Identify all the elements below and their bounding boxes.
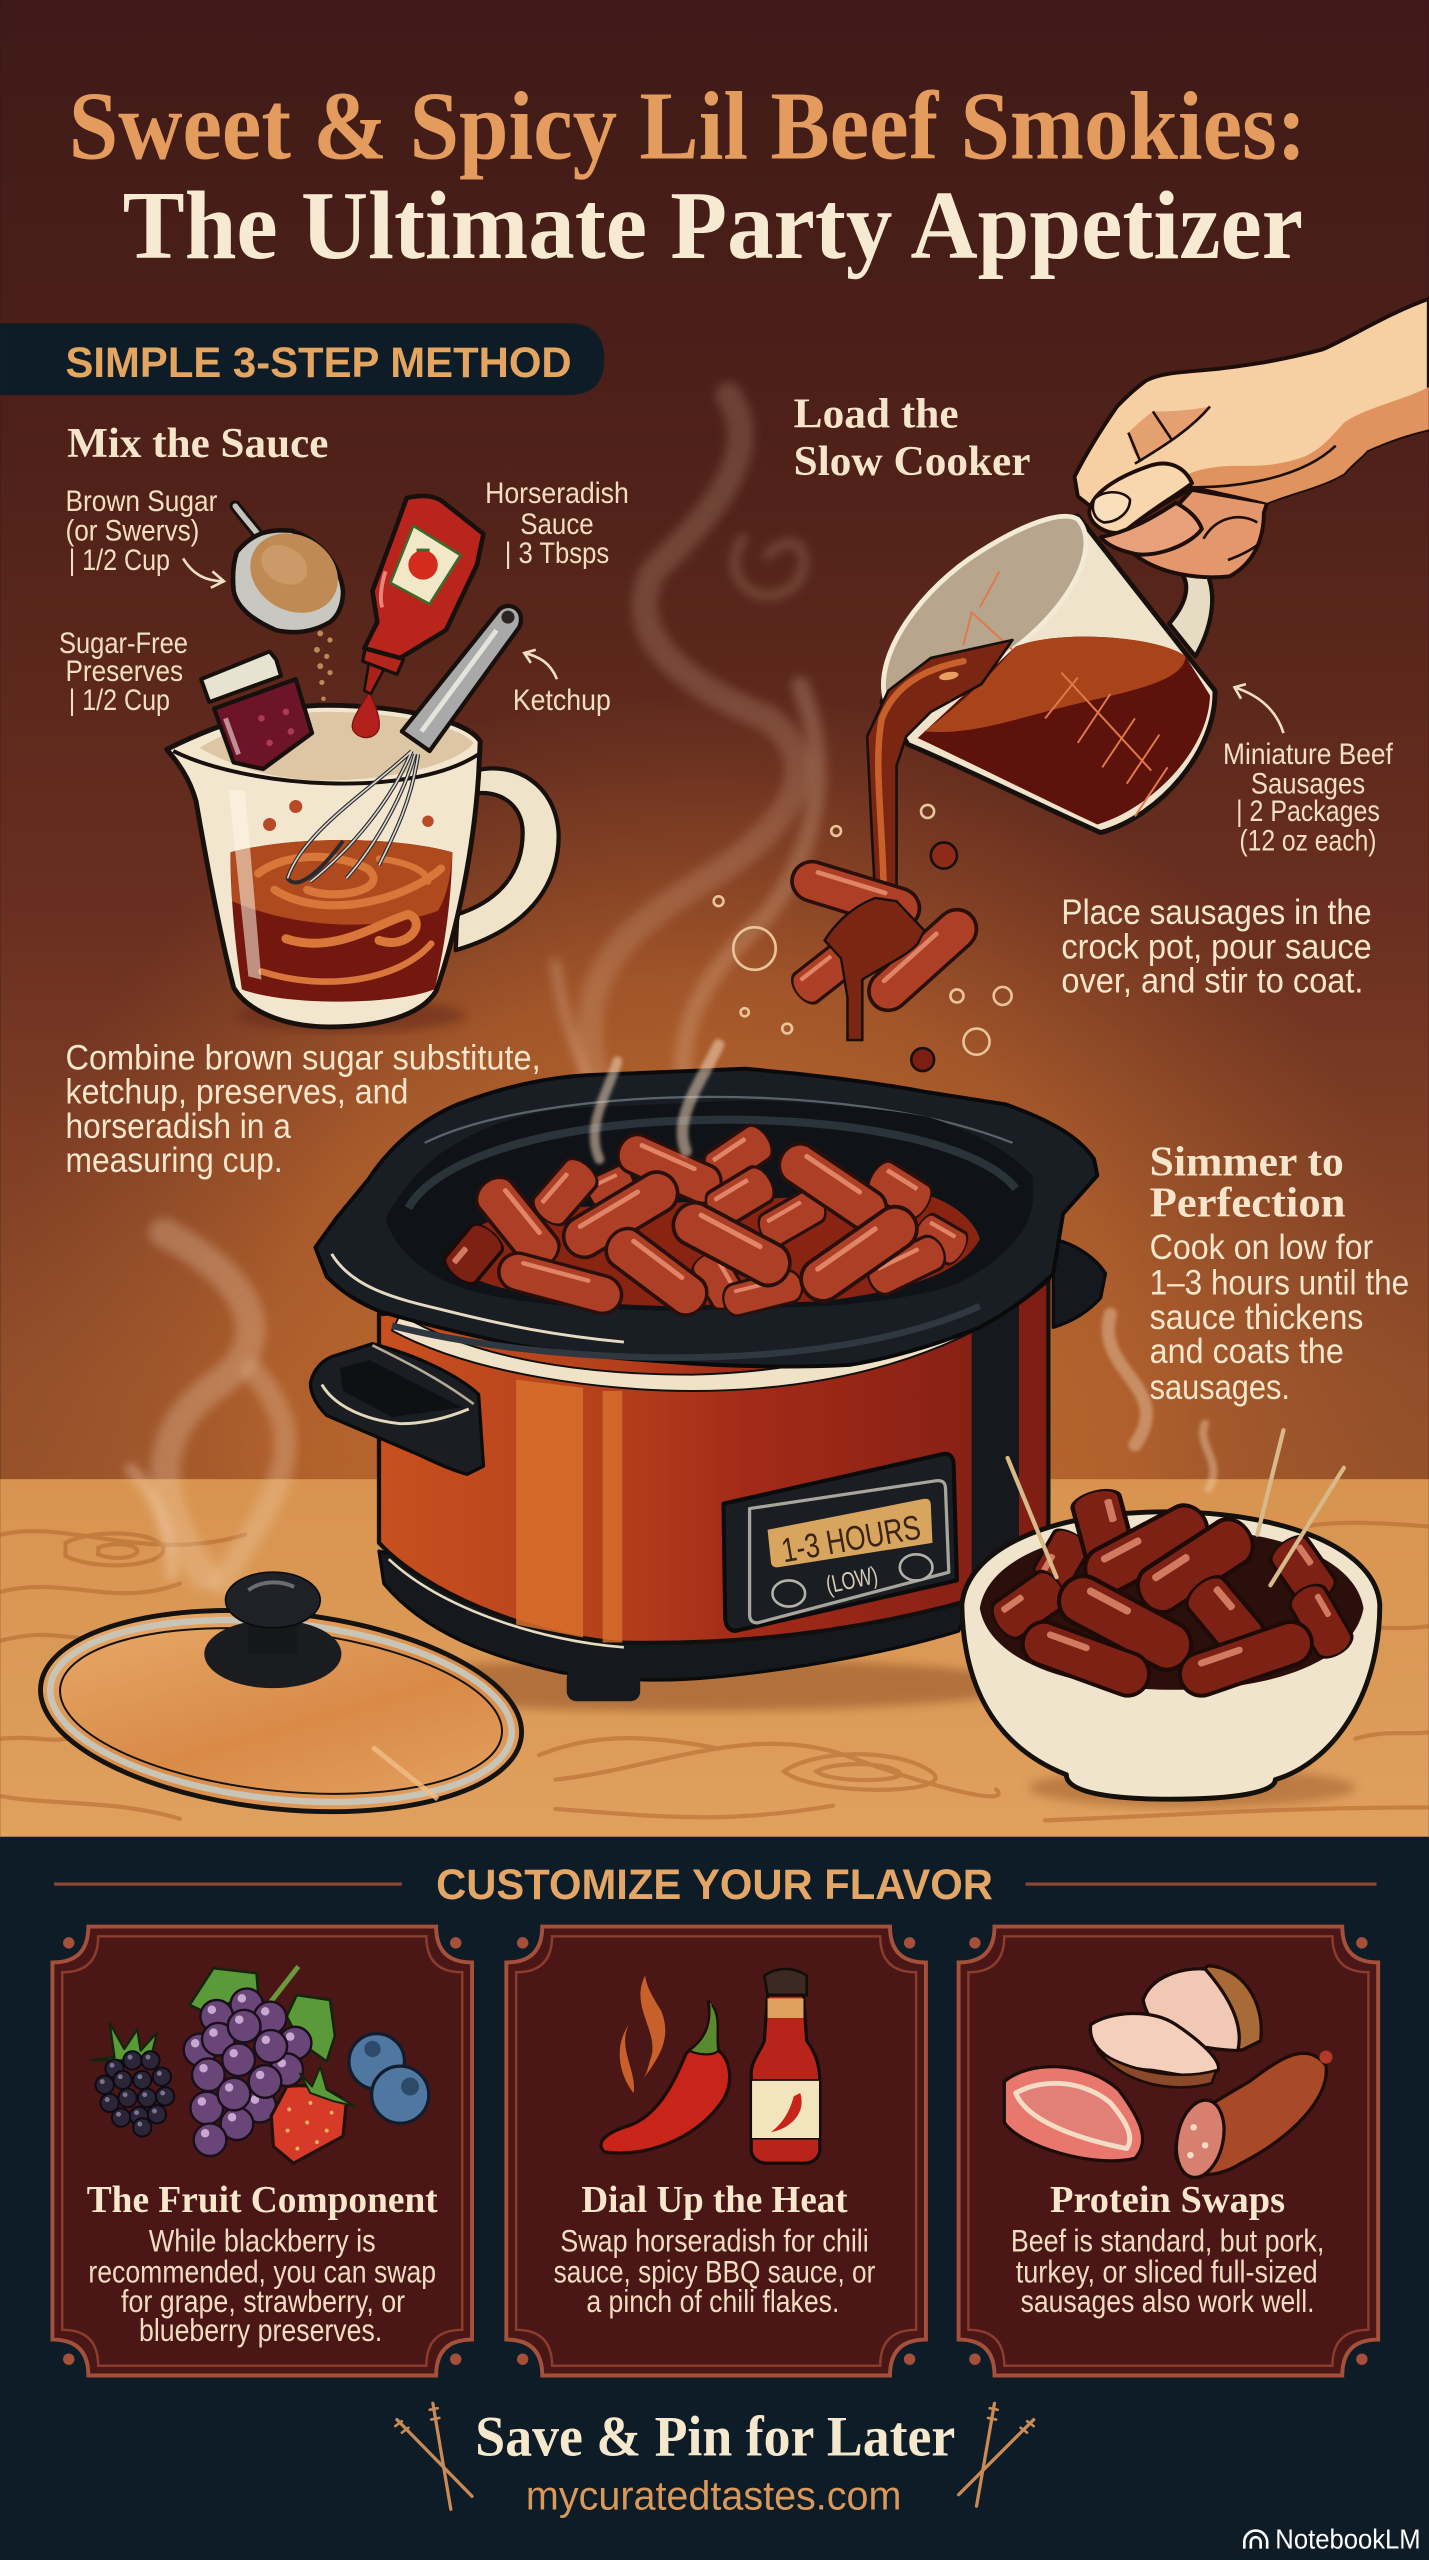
body: [882, 516, 1215, 833]
ingredient label: preserves: [59, 627, 188, 717]
card text: [88, 2223, 436, 2348]
ingredient label: sausages: | 2 Packages: [1236, 795, 1380, 828]
card text: [554, 2223, 875, 2319]
arrow: brown sugar: [183, 558, 224, 588]
slow cooker: [310, 1069, 1106, 1711]
section heading: customize: CUSTOMIZE YOUR FLAVOR: [436, 1861, 993, 1908]
step 3 instructions: and coats the: [1150, 1332, 1344, 1371]
control panel: 1-3 HOURS: [779, 1509, 924, 1570]
ingredient label: preserves: Sugar-Free: [59, 627, 188, 660]
card text: recommended, you can swap: [88, 2254, 436, 2289]
step 2 heading: Load the: [794, 391, 959, 438]
pour stream: [825, 640, 1012, 1040]
hand shading: [1172, 387, 1429, 503]
right dark edge: [972, 1298, 1019, 1592]
card title: Protein Swaps: [1050, 2180, 1285, 2221]
ingredient label: preserves: | 1/2 Cup: [69, 684, 170, 717]
step 2 instructions: over, and stir to coat.: [1061, 962, 1363, 1001]
card text: While blackberry is: [149, 2223, 376, 2258]
step 3 instructions: sausages.: [1150, 1368, 1290, 1407]
lower finger: [1101, 503, 1202, 555]
section heading: customize: [54, 1861, 1377, 1908]
step 3 heading: [1150, 1139, 1346, 1226]
ingredient label: preserves: Preserves: [66, 655, 183, 688]
sauce swirls: [258, 857, 441, 982]
card text: Beef is standard, but pork,: [1011, 2223, 1324, 2258]
thumb: [1089, 464, 1192, 533]
ingredient label: brown sugar: | 1/2 Cup: [69, 544, 170, 577]
sauce under sausages: [446, 1192, 980, 1306]
navy footer band: [0, 1837, 1429, 2560]
step 3 instructions: Cook on low for: [1150, 1228, 1374, 1267]
step 1 instructions: Combine brown sugar substitute,: [66, 1038, 541, 1077]
step 2 instructions: Place sausages in the: [1061, 893, 1372, 932]
base highlight: [389, 1559, 624, 1647]
pot opening: [386, 1100, 1033, 1311]
wooden table: [0, 1479, 1429, 1838]
cup handle: [456, 768, 559, 950]
ingredient label: horseradish: [485, 477, 629, 570]
palm and wrist: [1074, 299, 1429, 532]
toothpicks: [1008, 1430, 1344, 1585]
handle: [1169, 555, 1212, 656]
icon: chili and hot sauce: [601, 1969, 820, 2163]
control panel: [723, 1454, 957, 1631]
ketchup bottle: [352, 496, 483, 738]
sauce droplets and bubbles: [714, 805, 1012, 1191]
card title: Dial Up the Heat: [581, 2180, 848, 2221]
icon: crossed toothpicks right: [959, 2403, 1034, 2506]
falling sausages: [787, 857, 985, 1040]
card text: Swap horseradish for chili: [560, 2223, 869, 2258]
step 3 heading: Simmer to: [1150, 1139, 1344, 1186]
arrow: ketchup: [524, 650, 557, 679]
card text: [1011, 2223, 1324, 2319]
lid knob: [204, 1620, 341, 1688]
glass lid: [30, 1572, 532, 1834]
arrow: sausages: [1234, 684, 1283, 733]
title: [69, 72, 1306, 280]
steam wisps over pot: [595, 1045, 719, 1159]
step 1 instructions: ketchup, preserves, and: [66, 1073, 408, 1112]
bowl contents: [980, 1528, 1363, 1690]
step 3 instructions: [1150, 1228, 1409, 1407]
card text: turkey, or sliced full-sized: [1016, 2254, 1318, 2289]
rim interior: [883, 516, 1086, 705]
sausages in cooker: [440, 1120, 980, 1323]
steam: centre: [555, 395, 817, 1127]
step 2 instructions: crock pot, pour sauce: [1061, 927, 1372, 966]
hand: [1074, 299, 1429, 577]
ingredient label: sausages: [1223, 738, 1394, 858]
ingredient label: horseradish: Sauce: [520, 508, 594, 541]
liquid: [918, 637, 1210, 824]
ingredient label: sausages: Miniature Beef: [1223, 738, 1394, 771]
panel: protein swaps: [959, 1927, 1378, 2376]
icon: crossed toothpicks left: [395, 2403, 472, 2509]
highlight stripes: [516, 1380, 583, 1638]
title: The Ultimate Party Appetizer: [123, 172, 1303, 280]
icon: mixed berries: [90, 1967, 429, 2163]
ingredient label: sausages: Sausages: [1251, 767, 1365, 800]
website: mycuratedtastes.com: [526, 2472, 901, 2518]
ingredient label: ketchup: Ketchup: [513, 684, 611, 717]
step 2 heading: [794, 391, 1030, 485]
base: [379, 1551, 975, 1680]
scale marks: [963, 571, 1168, 816]
card text: a pinch of chili flakes.: [586, 2284, 839, 2319]
card text: blueberry preserves.: [139, 2313, 382, 2348]
section banner: simple 3-step method: [0, 323, 604, 395]
panel: dial up the heat: [506, 1927, 926, 2376]
jam jar: [201, 651, 312, 769]
step 1 instructions: horseradish in a: [66, 1107, 291, 1146]
step 2 instructions: [1061, 893, 1372, 1001]
watermark: NotebookLM: NotebookLM: [1275, 2524, 1421, 2555]
step 1 instructions: [66, 1038, 541, 1180]
sauce spatter: [289, 800, 302, 813]
pouring measuring cup: [825, 516, 1215, 1040]
step 3 heading: Perfection: [1150, 1179, 1346, 1226]
panel: fruit component: [52, 1927, 472, 2376]
cream band: [392, 1260, 1050, 1391]
step 2 heading: Slow Cooker: [794, 438, 1030, 485]
cup body: [167, 705, 480, 1027]
call to action: Save & Pin for Later: [475, 2406, 955, 2469]
cup highlight: [229, 790, 261, 980]
step 1 heading: Mix the Sauce: [67, 420, 328, 467]
warm background: [0, 0, 1429, 1837]
back fingers: [1133, 490, 1267, 577]
icon: meats: [1004, 1966, 1332, 2182]
section banner: simple 3-step method: SIMPLE 3-STEP METHOD: [66, 339, 572, 386]
right handle: [1053, 1239, 1106, 1327]
sugar falling: [314, 631, 333, 701]
measuring scoop of brown sugar: [233, 506, 352, 632]
steam: right near bowl: [1108, 1314, 1213, 1489]
left handle: [310, 1344, 483, 1474]
crock body: [379, 1265, 1048, 1643]
cup inside back: [199, 712, 474, 780]
title: Sweet & Spicy Lil Beef Smokies:: [69, 72, 1306, 180]
step 1 instructions: measuring cup.: [66, 1141, 283, 1180]
card text: for grape, strawberry, or: [121, 2284, 405, 2319]
cooker shadow: [343, 1659, 1029, 1711]
serving bowl: [962, 1430, 1380, 1807]
ingredient label: sausages: (12 oz each): [1239, 825, 1377, 858]
rim: [315, 1069, 1097, 1367]
ingredient label: brown sugar: (or Swervs): [66, 514, 199, 547]
card title: The Fruit Component: [87, 2180, 438, 2221]
ingredient label: horseradish: Horseradish: [485, 477, 629, 510]
card text: sauce, spicy BBQ sauce, or: [554, 2254, 875, 2289]
control panel: (LOW): [824, 1562, 880, 1599]
ingredient label: brown sugar: [66, 485, 218, 577]
step 3 instructions: sauce thickens: [1150, 1298, 1363, 1337]
steam: left of cooker: [131, 1233, 285, 1584]
ingredient label: horseradish: | 3 Tbsps: [505, 537, 609, 570]
sauce: [230, 840, 452, 1002]
whisk: [288, 606, 521, 882]
mixing cup with sauce: [167, 606, 559, 1032]
card text: sausages also work well.: [1021, 2284, 1314, 2319]
ingredient label: brown sugar: Brown Sugar: [66, 485, 218, 518]
